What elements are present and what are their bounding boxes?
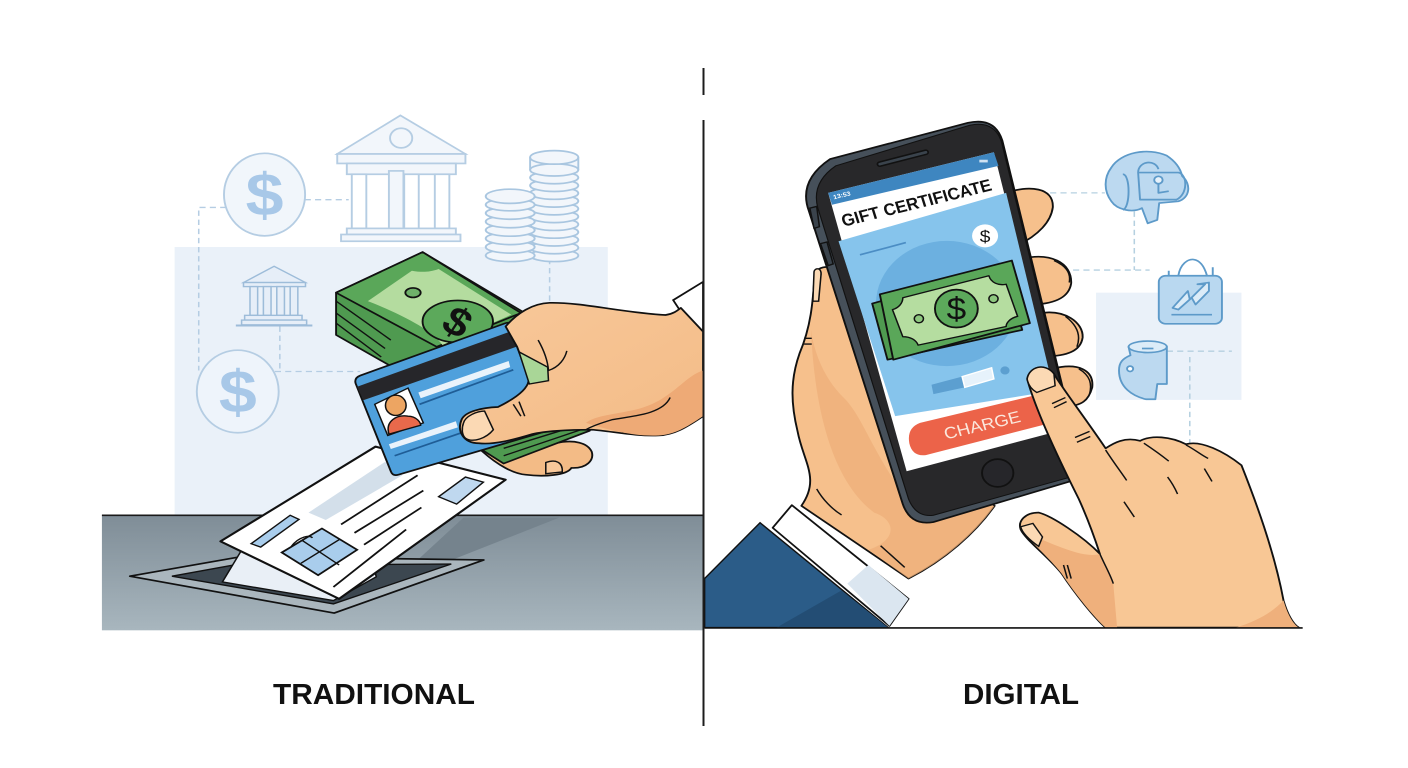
background tint panel	[175, 247, 608, 515]
charge button: CHARGE	[941, 407, 1023, 443]
panel: traditional	[102, 115, 703, 630]
dollar badge: $	[980, 227, 990, 246]
label: digital: DIGITAL	[963, 679, 1079, 711]
lower cash stack	[477, 419, 591, 464]
icon: dollar coin upper: $	[246, 161, 283, 229]
paper behind	[222, 543, 376, 601]
icon: dollar coin lower: $	[219, 358, 257, 426]
dashed connectors	[199, 200, 550, 372]
icon: dollar coin upper	[224, 153, 305, 236]
banknote	[872, 261, 1030, 360]
cash stack	[336, 252, 529, 381]
document	[221, 447, 506, 599]
suit sleeve	[705, 505, 909, 628]
home button	[982, 459, 1013, 487]
progress bar	[932, 366, 1010, 394]
phone	[806, 122, 1085, 523]
lower fingers	[483, 441, 592, 476]
label: traditional: TRADITIONAL	[273, 679, 475, 711]
icon: coin stacks	[486, 151, 578, 262]
panel: digital	[705, 122, 1303, 628]
icon: piggy mug	[1119, 341, 1167, 399]
icon: small bank	[236, 266, 312, 325]
sleeve	[673, 282, 703, 335]
screen: 13:53	[833, 191, 852, 201]
thumb nail	[462, 411, 493, 440]
pointing hand	[1020, 367, 1299, 628]
holding hand	[793, 267, 995, 579]
cash stack: $	[434, 297, 481, 348]
charge button	[909, 395, 1044, 455]
background tint panel	[1096, 293, 1241, 400]
screen	[828, 152, 1064, 471]
dashed connectors	[1050, 193, 1232, 443]
speaker	[880, 152, 926, 164]
icon: dollar coin lower	[197, 350, 279, 433]
icon: shopping bag chart	[1159, 259, 1222, 324]
card	[355, 323, 550, 475]
icon: cloud lock	[1106, 152, 1188, 223]
counter surface	[102, 515, 703, 630]
banknote: $	[947, 293, 966, 327]
icon: large bank	[337, 115, 465, 241]
vertical divider	[702, 68, 704, 726]
hand holding card	[460, 303, 703, 444]
deposit slot	[130, 557, 484, 613]
fingers behind phone	[1006, 189, 1092, 408]
screen title: GIFT CERTIFICATE	[839, 176, 994, 230]
dollar badge	[972, 224, 998, 247]
baseline	[705, 625, 1303, 630]
